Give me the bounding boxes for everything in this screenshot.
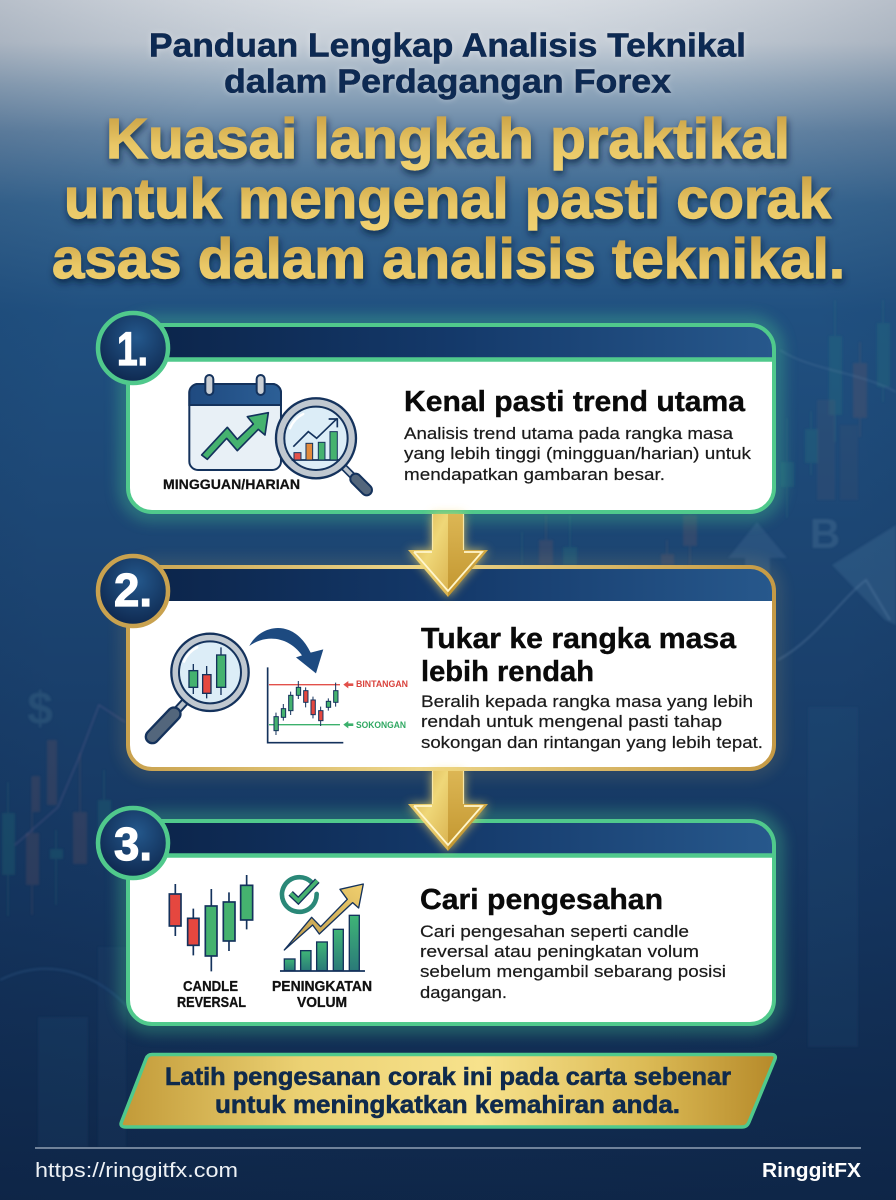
step 2 text: rendah untuk mengenal pasti tahap: [421, 712, 722, 731]
step number 2: 2.: [114, 564, 152, 616]
step 3 text: Cari pengesahan seperti candle: [420, 922, 689, 941]
icon label: MINGGUAN/HARIAN: [163, 476, 300, 492]
icon label: candle reversal: [177, 979, 246, 1011]
title: dalam Perdagangan Forex: [224, 62, 672, 100]
icon: volume increase: [280, 877, 365, 971]
icon: magnifier and chart: [152, 628, 353, 743]
step 2 heading: [421, 623, 737, 688]
icon label: candle reversal: REVERSAL: [177, 995, 246, 1011]
step 2 text: sokongan dan rintangan yang lebih tepat.: [421, 733, 763, 752]
icon label: volume increase: PENINGKATAN: [272, 979, 372, 995]
panel: step 2: [98, 556, 776, 771]
step 3 text: dagangan.: [420, 983, 507, 1002]
step 3 text: reversal atau peningkatan volum: [420, 942, 699, 961]
step 3 text: [420, 922, 726, 1002]
step 1 text: [404, 424, 752, 484]
icon: reversal candles: [169, 875, 253, 971]
step 2 heading: Tukar ke rangka masa: [421, 623, 737, 655]
step number 1: 1.: [117, 322, 148, 375]
headline: untuk mengenal pasti corak: [64, 167, 831, 231]
step 1 text: Analisis trend utama pada rangka masa: [404, 424, 734, 443]
background: B: [810, 510, 840, 557]
title: Panduan Lengkap Analisis Teknikal: [149, 26, 746, 64]
arrow: step 1 to step 2: [408, 514, 488, 597]
footer brand: RinggitFX: [762, 1159, 861, 1182]
callout banner: Latih pengesanan corak ini pada carta sebenar: [165, 1063, 731, 1091]
step 1 text: yang lebih tinggi (mingguan/harian) untuk: [404, 444, 752, 463]
callout banner: untuk meningkatkan kemahiran anda.: [215, 1091, 680, 1119]
headline: Kuasai langkah praktikal: [106, 107, 790, 171]
step number 1: [98, 313, 168, 383]
footer url: https://ringgitfx.com: [35, 1159, 238, 1182]
panel: step 1: [98, 313, 776, 514]
icon label: volume increase: VOLUM: [297, 995, 347, 1011]
callout banner: [121, 1054, 775, 1127]
title: [149, 26, 746, 100]
headline: asas dalam analisis teknikal.: [52, 227, 845, 291]
chart label: resistance: BINTANGAN: [356, 679, 408, 690]
step 1 text: mendapatkan gambaran besar.: [404, 465, 665, 484]
arrow: step 2 to step 3: [408, 771, 488, 851]
panel: step 3: [98, 808, 776, 1026]
step 2 text: Beralih kepada rangka masa yang lebih: [421, 692, 753, 711]
step 2 heading: lebih rendah: [421, 656, 594, 688]
chart label: support: SOKONGAN: [356, 720, 406, 731]
background: $: [27, 682, 53, 734]
icon: calendar with magnifier: [189, 375, 367, 490]
icon label: volume increase: [272, 979, 372, 1011]
step 3 text: sebelum mengambil sebarang posisi: [420, 962, 726, 981]
step number 3: 3.: [114, 818, 152, 870]
step number 2: [98, 556, 168, 626]
step 1 heading: Kenal pasti trend utama: [404, 386, 746, 418]
step 3 heading: Cari pengesahan: [420, 884, 663, 916]
step 2 text: [421, 692, 763, 752]
headline: [52, 107, 845, 291]
step number 3: [98, 808, 168, 878]
icon label: candle reversal: CANDLE: [183, 979, 238, 995]
